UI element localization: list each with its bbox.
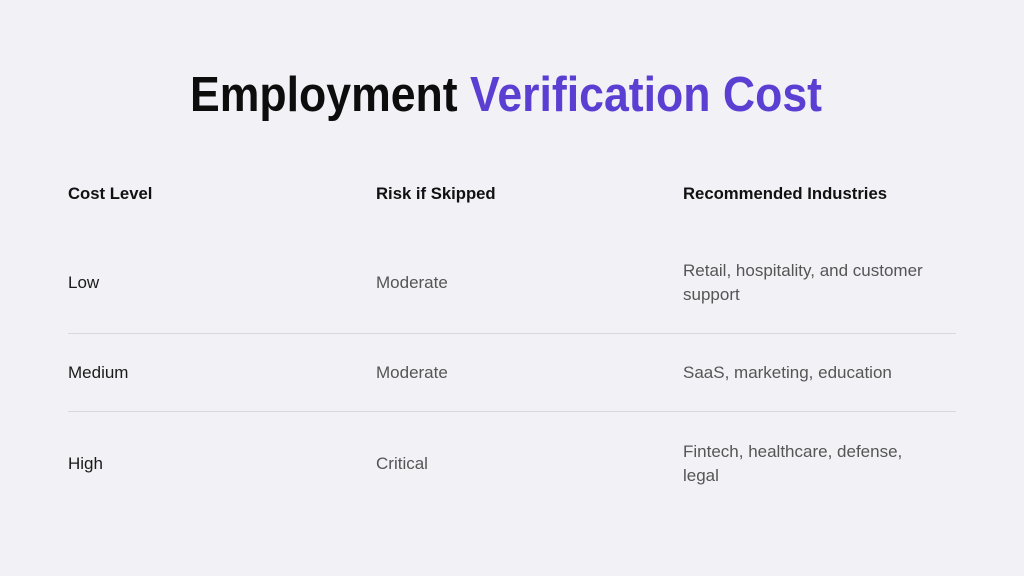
table — [68, 184, 956, 485]
row: low: Retail, hospitality, and customer support — [683, 261, 923, 304]
row: medium: SaaS, marketing, education — [683, 363, 892, 382]
title: Employment Verification Cost — [190, 68, 822, 122]
header: risk: Risk if Skipped — [376, 184, 496, 203]
row: medium — [68, 363, 892, 382]
row: high: High — [68, 454, 103, 473]
header: cost level: Cost Level — [68, 184, 152, 203]
row: low: Low — [68, 273, 99, 292]
row: high: Fintech, healthcare, defense, legal — [683, 442, 902, 485]
row: medium: Medium — [68, 363, 128, 382]
header: industries: Recommended Industries — [683, 184, 887, 203]
row: low: Moderate — [376, 273, 448, 292]
row: high: Critical — [376, 454, 428, 473]
row: high — [68, 442, 902, 485]
row: low — [68, 261, 923, 304]
row: medium: Moderate — [376, 363, 448, 382]
